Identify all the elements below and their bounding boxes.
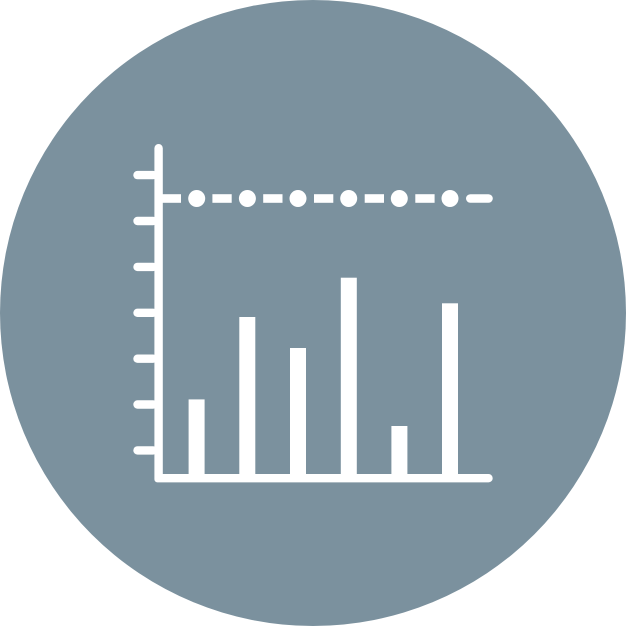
chart icon xyxy=(133,144,493,482)
dashed target line with dots xyxy=(160,190,493,207)
y axis xyxy=(154,144,163,474)
x axis xyxy=(154,474,493,482)
bars xyxy=(189,278,458,475)
y axis tick marks xyxy=(133,171,157,455)
